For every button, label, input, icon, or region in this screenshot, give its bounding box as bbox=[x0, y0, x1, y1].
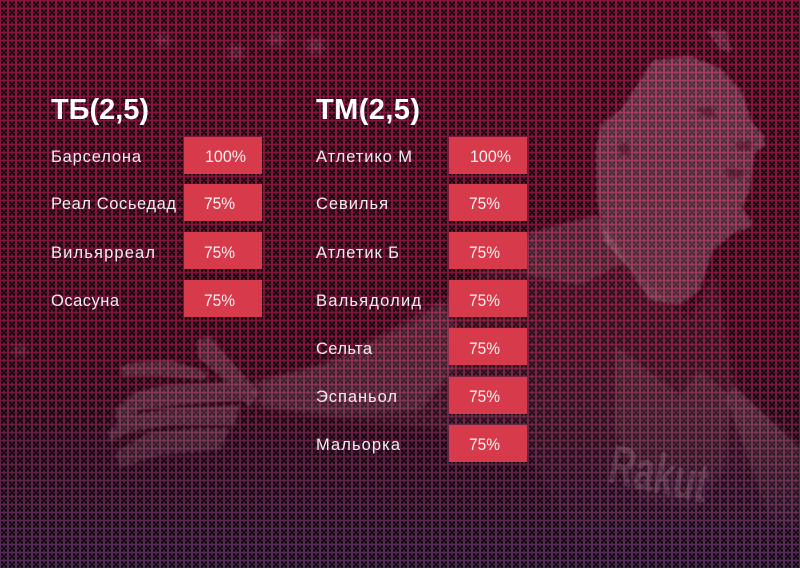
row: Сельта bbox=[316, 328, 527, 365]
row: Барселона bbox=[51, 137, 262, 174]
row: Барселона: Барселона bbox=[51, 148, 142, 166]
row: Атлетико М: Атлетико М bbox=[316, 148, 412, 166]
photo: head and neck bbox=[596, 56, 765, 305]
photo: left shoulder bbox=[527, 215, 625, 285]
ring finger bbox=[108, 405, 240, 442]
row: Реал Сосьедад bbox=[51, 184, 262, 221]
row: Севилья: Севилья bbox=[316, 195, 388, 213]
row: Вальядолид: Вальядолид bbox=[316, 292, 421, 310]
row: Атлетик Б bbox=[316, 232, 527, 269]
heading: ТБ(2,5): ТБ(2,5) bbox=[51, 94, 149, 126]
heading: ТМ(2,5): ТМ(2,5) bbox=[316, 94, 420, 126]
index finger bbox=[120, 360, 208, 380]
row: Атлетико М bbox=[316, 137, 527, 174]
row: Севилья: 75% bbox=[469, 194, 500, 213]
ear detail bbox=[618, 142, 630, 155]
photo: jersey folds bbox=[616, 347, 730, 484]
row: Осасуна: Осасуна bbox=[51, 292, 120, 310]
column: ТМ(2,5) bbox=[316, 94, 527, 462]
row: Севилья bbox=[316, 184, 527, 221]
row: Эспаньол: 75% bbox=[469, 387, 500, 406]
row: Барселона: 100% bbox=[205, 147, 246, 166]
row: Вальядолид: 75% bbox=[469, 291, 500, 310]
middle finger bbox=[115, 382, 245, 425]
row: Вильярреал: Вильярреал bbox=[51, 244, 155, 262]
photo: face shadows bbox=[618, 106, 752, 178]
row: Атлетико М: 100% bbox=[470, 147, 511, 166]
eye bbox=[695, 106, 716, 118]
row: Сельта: 75% bbox=[469, 339, 500, 358]
row: Эспаньол bbox=[316, 377, 527, 414]
row: Осасуна: 75% bbox=[204, 291, 235, 310]
nostril bbox=[735, 141, 752, 150]
photo: hair tuft bbox=[707, 30, 732, 52]
column: ТБ(2,5) bbox=[51, 94, 262, 317]
row: Вальядолид bbox=[316, 280, 527, 317]
photo: forearm bbox=[250, 300, 470, 415]
row: Мальорка: 75% bbox=[469, 435, 500, 454]
row: Эспаньол: Эспаньол bbox=[316, 388, 397, 406]
photo: torso bbox=[262, 217, 798, 482]
little finger bbox=[115, 428, 230, 468]
row: Реал Сосьедад: 75% bbox=[204, 194, 235, 213]
row: Атлетик Б: Атлетик Б bbox=[316, 244, 399, 262]
row: Сельта: Сельта bbox=[316, 340, 373, 358]
mouth bbox=[725, 168, 745, 178]
row: Мальорка bbox=[316, 425, 527, 462]
row: Реал Сосьедад: Реал Сосьедад bbox=[51, 195, 176, 213]
row: Осасуна bbox=[51, 280, 262, 317]
row: Атлетик Б: 75% bbox=[469, 243, 500, 262]
row: Вильярреал bbox=[51, 232, 262, 269]
row: Вильярреал: 75% bbox=[204, 243, 235, 262]
photo: blurred crowd lights bbox=[13, 31, 325, 357]
photo: right shoulder bbox=[728, 386, 800, 516]
row: Мальорка: Мальорка bbox=[316, 436, 401, 454]
photo: hand and fingers bbox=[108, 336, 258, 468]
thumb bbox=[197, 336, 258, 408]
photo: shirt sponsor: Rakut bbox=[604, 432, 714, 515]
